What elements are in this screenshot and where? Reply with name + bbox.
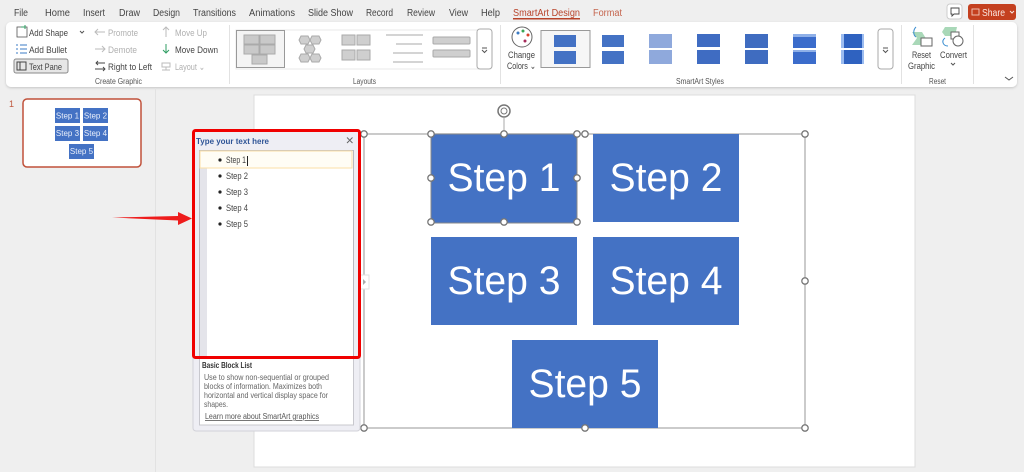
pane toggle tab [360, 275, 369, 289]
block: step 1: Step 1 [448, 156, 560, 200]
menu tabs: View [449, 8, 469, 19]
slide thumbnail [23, 99, 141, 167]
text list: Step 3 [226, 187, 248, 197]
close icon [347, 138, 352, 143]
slide thumbnail: Step 1 [56, 112, 80, 120]
menu tabs: SmartArt Design [513, 8, 580, 19]
block: step 1 [431, 134, 577, 223]
create graphic group: Move Up [175, 28, 207, 39]
change colors button: Change [508, 50, 535, 61]
block: step 4: Step 4 [610, 259, 722, 303]
text list: Step 5 [226, 219, 248, 229]
block: step 3: Step 3 [448, 259, 560, 303]
text list: Step 1 [226, 155, 246, 165]
red arrow [112, 212, 192, 225]
block: step 3 [431, 237, 577, 325]
create graphic group: Create Graphic [95, 77, 142, 86]
slide thumbnail: Step 4 [84, 129, 108, 138]
create graphic group [14, 25, 218, 86]
ribbon [6, 22, 1017, 87]
smartart styles gallery: SmartArt Styles [676, 77, 724, 86]
text list: Step 4 [226, 203, 248, 213]
share button [968, 4, 1016, 20]
menu tabs: Record [366, 8, 393, 19]
menu tabs: Draw [119, 8, 141, 19]
block: step 5 [512, 340, 658, 428]
create graphic group: Layout ⌄ [175, 62, 205, 73]
block: step 4 [593, 237, 739, 325]
change colors button: Colors ⌄ [507, 61, 536, 72]
layouts gallery [236, 29, 492, 86]
description: shapes. [204, 400, 228, 409]
create graphic group: Text Pane [29, 62, 62, 73]
menu tabs: Transitions [193, 8, 236, 19]
block: step 5: Step 5 [528, 362, 642, 406]
slide thumbnail: Step 2 [84, 112, 108, 120]
reset group: Reset [929, 77, 947, 86]
menu tabs: Animations [249, 8, 295, 19]
menu tabs: Insert [83, 8, 105, 19]
description: blocks of information. Maximizes both [204, 382, 322, 391]
description: Use to show non-sequential or grouped [204, 373, 329, 382]
change colors button [507, 27, 536, 72]
reset group: Graphic [908, 61, 935, 72]
share button: Share [982, 7, 1005, 19]
menu tabs: Design [153, 8, 180, 19]
selection handles [361, 105, 808, 431]
block: step 2 [593, 134, 739, 222]
create graphic group: Add Shape [29, 28, 68, 39]
slide number: 1 [9, 99, 14, 109]
smartart styles gallery [541, 29, 893, 86]
text pane heading: Type your text here [196, 136, 269, 146]
block: step 2: Step 2 [610, 156, 722, 200]
menu tabs: Slide Show [308, 8, 354, 19]
text list [200, 150, 354, 356]
menu tabs: Home [45, 8, 70, 19]
reset group: Convert [940, 50, 967, 61]
text list: Step 2 [226, 171, 248, 181]
red highlight box [194, 130, 360, 358]
menu tabs: Review [407, 8, 436, 19]
text pane [193, 130, 360, 431]
description: Basic Block List [202, 361, 252, 370]
description [200, 358, 354, 425]
slide thumbnail: Step 3 [56, 129, 80, 138]
reset group [908, 27, 967, 86]
menu tabs: Format [593, 8, 622, 19]
slide canvas [254, 95, 915, 467]
create graphic group: Promote [108, 28, 138, 39]
create graphic group: Add Bullet [29, 45, 67, 56]
create graphic group: Move Down [175, 45, 218, 56]
description: horizontal and vertical display space for [204, 391, 328, 400]
description: Learn more about SmartArt graphics [205, 412, 319, 421]
reset group: Reset [912, 50, 931, 61]
menu tabs: File [14, 8, 28, 19]
smartart frame [364, 134, 805, 428]
comment button [947, 4, 962, 19]
create graphic group: Demote [108, 45, 137, 56]
collapse chevron [1005, 77, 1013, 80]
slide thumbnail: Step 5 [70, 147, 94, 156]
menu tabs: Help [481, 8, 500, 19]
layouts gallery: Layouts [353, 77, 376, 86]
create graphic group: Right to Left [108, 62, 152, 73]
menu tabs [14, 8, 622, 20]
